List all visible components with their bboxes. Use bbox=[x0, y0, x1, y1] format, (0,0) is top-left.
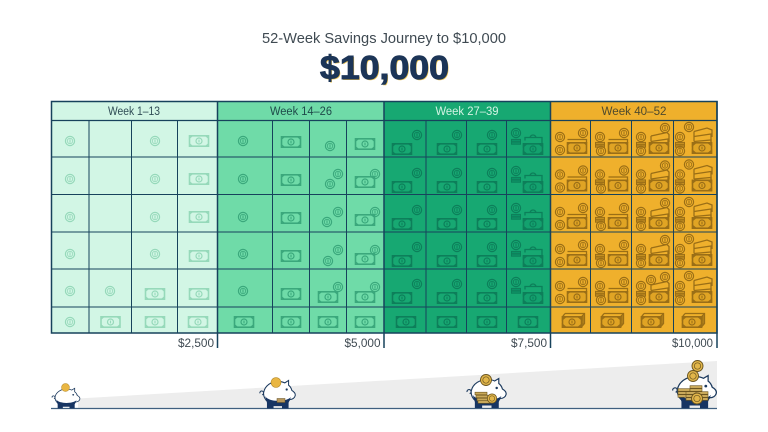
icons: week 40–52 savings bbox=[555, 122, 712, 327]
panel: week 27–39 bbox=[384, 101, 550, 333]
heading: week 1–13: Week 1–13 bbox=[108, 106, 160, 118]
heading: week 27–39: Week 27–39 bbox=[436, 106, 498, 118]
icon: piggy bank 2 bbox=[260, 378, 295, 408]
icon: piggy bank 1 bbox=[52, 384, 80, 408]
heading: week 14–26: Week 14–26 bbox=[270, 106, 332, 118]
headline amount: $10,000 bbox=[320, 49, 449, 86]
icons: week 27–39 savings bbox=[392, 128, 542, 327]
milestone labels: $5,000 bbox=[344, 338, 380, 350]
milestone labels: $7,500 bbox=[511, 338, 547, 350]
heading: week 40–52: Week 40–52 bbox=[602, 106, 666, 118]
panel: week 1–13 bbox=[51, 101, 218, 333]
panel: week 14–26 bbox=[218, 101, 384, 333]
growth wedge bbox=[78, 361, 717, 408]
headline amount: $10,000 bbox=[321, 50, 450, 87]
milestone labels: $10,000 bbox=[672, 338, 713, 350]
panel: week 40–52 bbox=[550, 101, 717, 333]
title: 52-Week Savings Journey to $10,000 bbox=[262, 31, 506, 47]
icons: week 14–26 savings bbox=[234, 136, 380, 327]
icons: week 1–13 savings bbox=[65, 136, 209, 327]
icon: piggy bank 3 bbox=[467, 374, 506, 408]
milestone labels: $2,500 bbox=[178, 338, 214, 350]
milestone labels bbox=[178, 338, 713, 350]
icon: piggy bank 4 bbox=[673, 360, 716, 408]
